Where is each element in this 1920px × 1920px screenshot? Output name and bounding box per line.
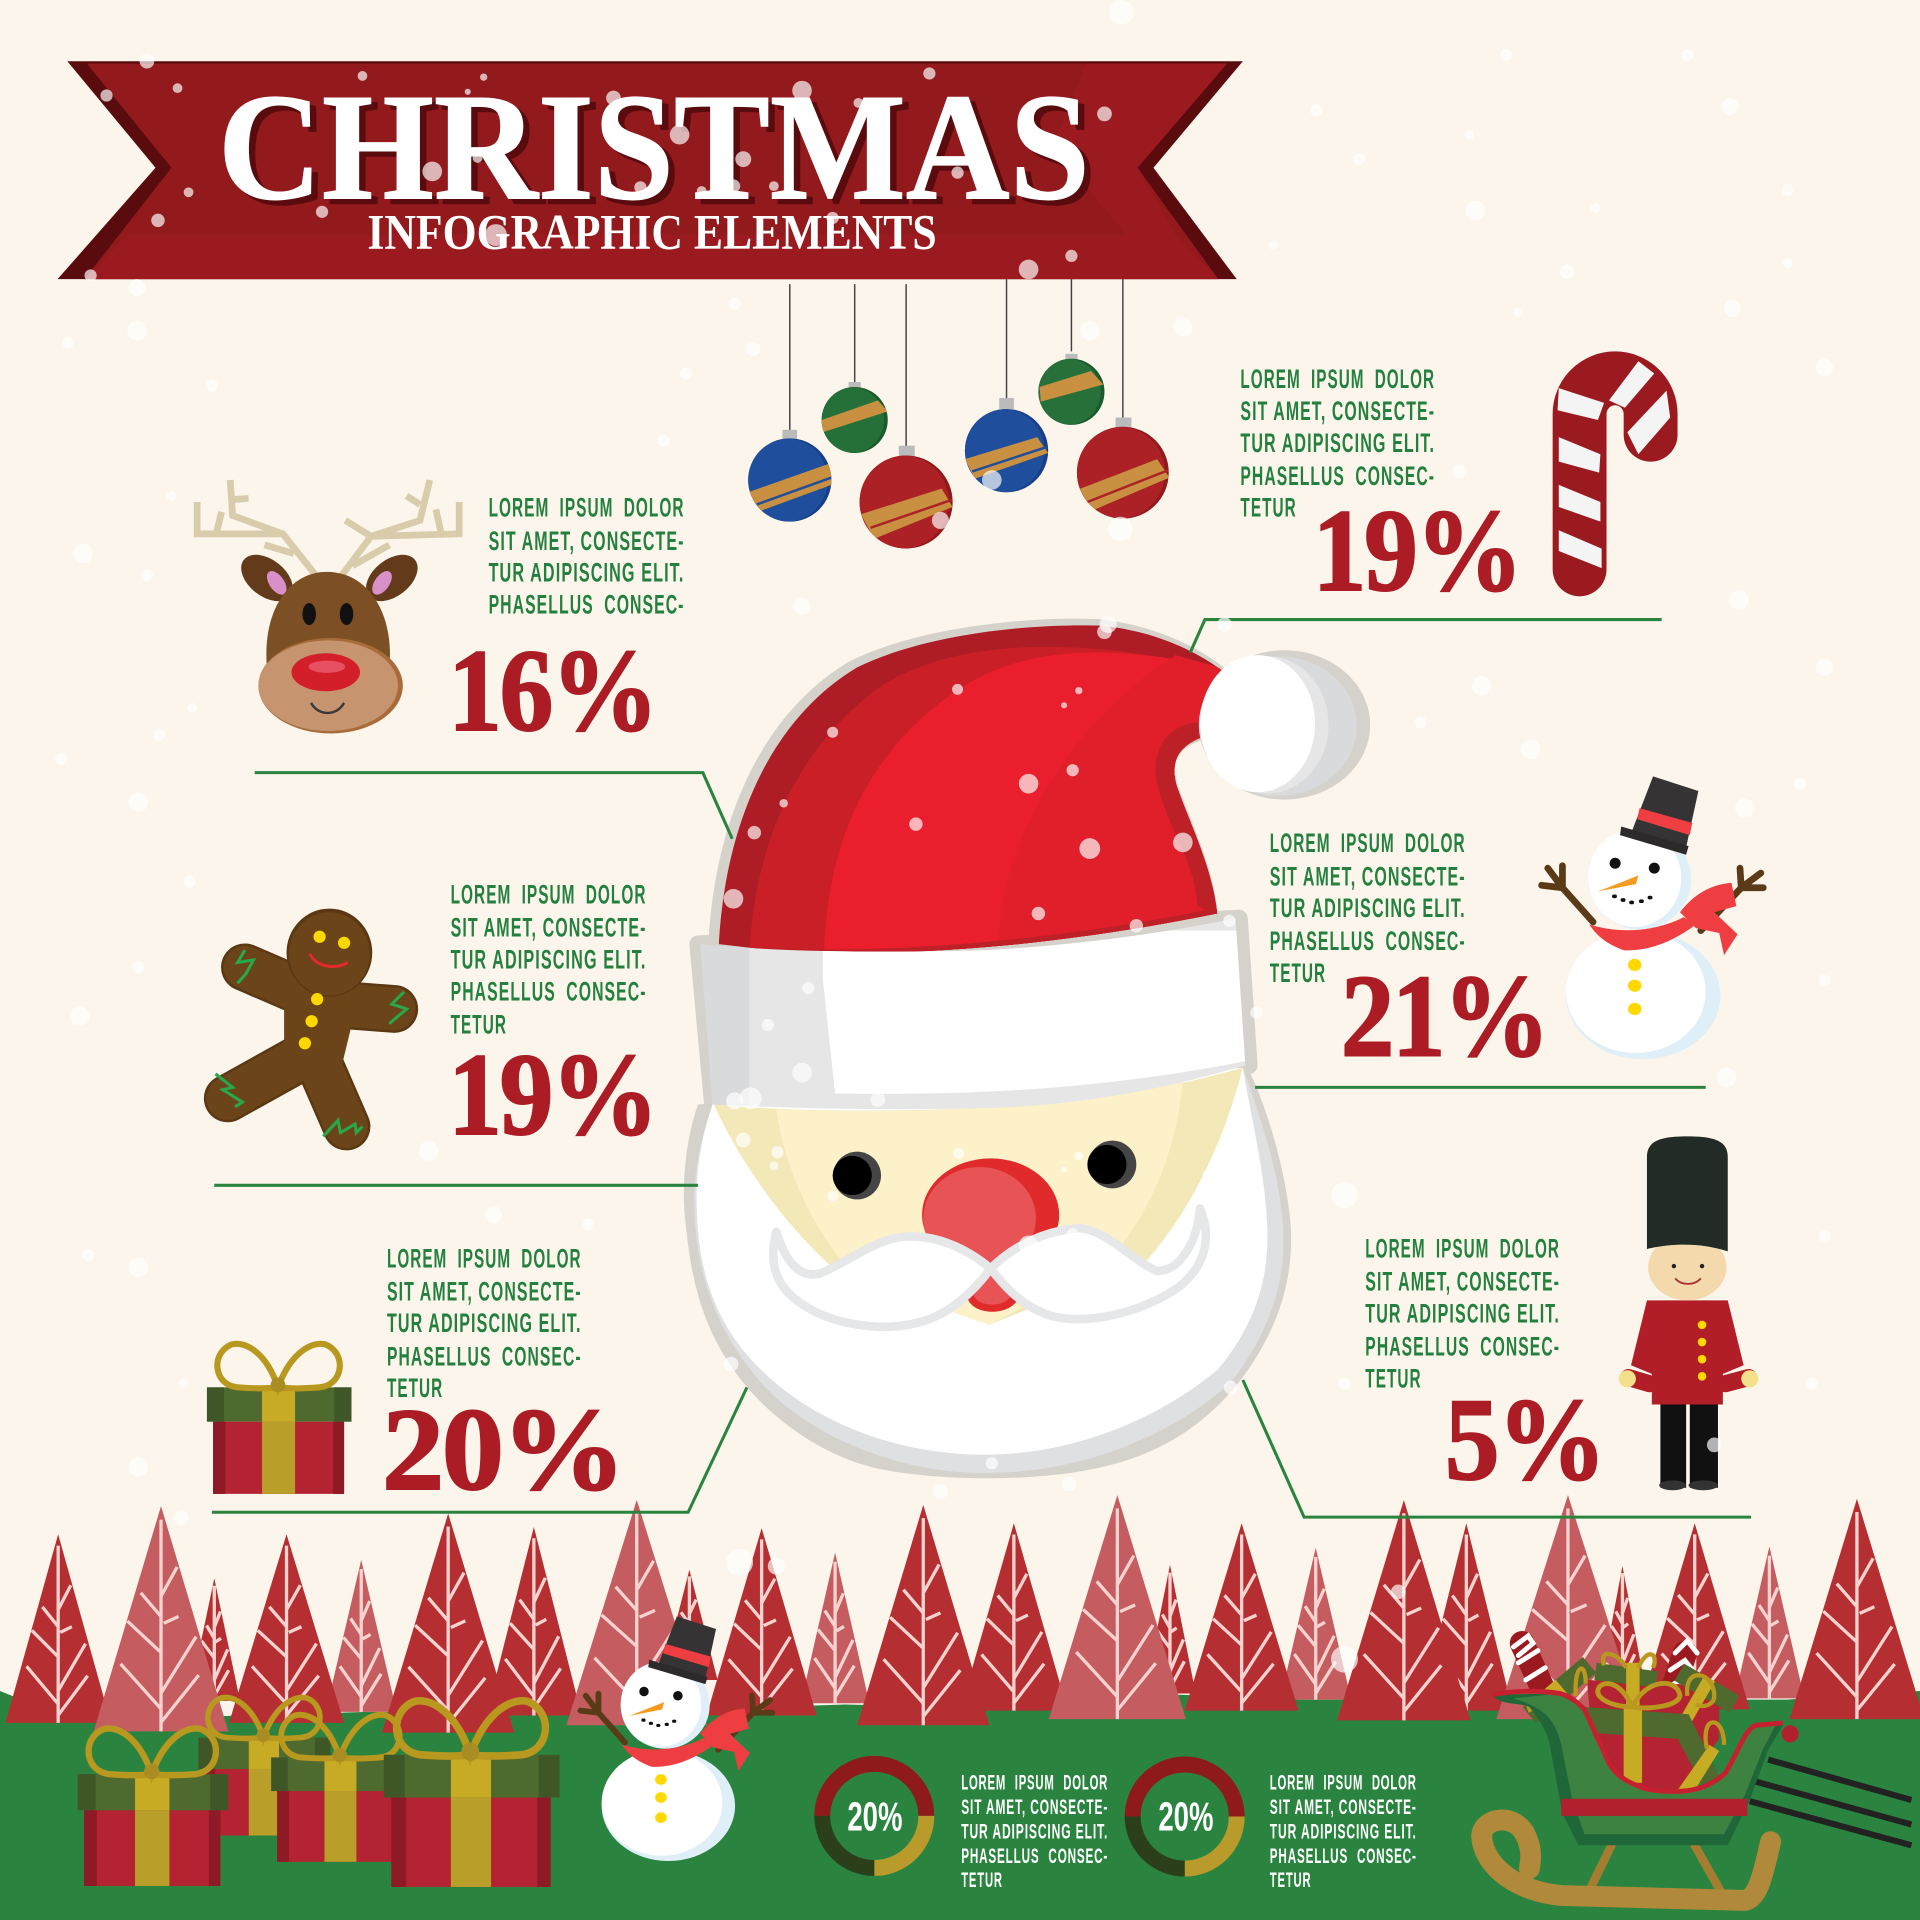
text block: chart right (1270, 1772, 1417, 1892)
ornament: red center (856, 446, 955, 551)
donut chart left (822, 1764, 926, 1868)
text block: snowman: TETUR (1270, 958, 1326, 988)
percent: soldier: 5% (1445, 1375, 1604, 1505)
band outline (698, 918, 1249, 1104)
text block: chart left (961, 1772, 1108, 1892)
tree line (6, 1495, 1920, 1733)
gifts in sleigh (1523, 1654, 1739, 1790)
fur band (700, 918, 1245, 1109)
sleigh body (1493, 1693, 1783, 1845)
title banner (58, 61, 1243, 279)
toy soldier icon (1619, 1136, 1758, 1490)
text block: gift: TETUR (387, 1373, 443, 1403)
text block: snowman: LOREM IPSUM DOLOR (1270, 828, 1466, 858)
santa head (684, 600, 1370, 1478)
text block: snowman: SIT AMET, CONSECTE- (1270, 861, 1466, 891)
heading: CHRISTMAS: CHRISTMAS (218, 63, 1090, 232)
text block: soldier: SIT AMET, CONSECTE- (1365, 1267, 1560, 1297)
beard outline (684, 1068, 1291, 1478)
text block: gingerbread: TETUR (451, 1009, 507, 1039)
hat outline (714, 624, 1220, 943)
text block: soldier: TETUR (1365, 1363, 1422, 1393)
text block: gingerbread: SIT AMET, CONSECTE- (451, 913, 647, 943)
text block: chart left: TUR ADIPISCING ELIT. (961, 1821, 1108, 1844)
text block: soldier (1365, 1234, 1560, 1393)
ground (0, 1691, 1920, 1920)
text block: snowman: PHASELLUS CONSEC- (1270, 926, 1466, 956)
beard (694, 1068, 1283, 1473)
text block: gingerbread (451, 880, 647, 1039)
ornament: red right (1076, 418, 1169, 519)
text block: chart right: TETUR (1270, 1869, 1311, 1892)
text block: snowman (1270, 828, 1466, 988)
text block: candy cane: LOREM IPSUM DOLOR (1240, 364, 1435, 394)
runner (1482, 1820, 1771, 1900)
text block: gift: LOREM IPSUM DOLOR (387, 1243, 582, 1273)
text block: gift: SIT AMET, CONSECTE- (387, 1276, 582, 1306)
eye left (833, 1152, 881, 1199)
candy canes in sleigh (1513, 1636, 1697, 1704)
text block: reindeer (489, 493, 684, 619)
hat (718, 625, 1222, 952)
text block: gingerbread: TUR ADIPISCING ELIT. (451, 945, 647, 975)
text block: reindeer: PHASELLUS CONSEC- (489, 589, 684, 619)
text block: reindeer: SIT AMET, CONSECTE- (489, 526, 684, 556)
ornament: blue right (964, 398, 1048, 492)
moustache (773, 1209, 1206, 1327)
gingerbread man icon (216, 909, 407, 1136)
bottom snowman (580, 1616, 772, 1861)
text block: candy cane (1240, 364, 1435, 523)
text block: chart right: TUR ADIPISCING ELIT. (1270, 1821, 1417, 1844)
nose (922, 1158, 1059, 1271)
gift pile (78, 1697, 560, 1887)
text block: chart right: SIT AMET, CONSECTE- (1270, 1796, 1417, 1819)
text block: candy cane: TUR ADIPISCING ELIT. (1240, 428, 1435, 458)
text block: candy cane: TETUR (1240, 493, 1297, 523)
text block: soldier: LOREM IPSUM DOLOR (1365, 1234, 1560, 1264)
donut chart right: 20% (1158, 1794, 1213, 1840)
percent: gingerbread: 19% (448, 1030, 656, 1160)
donut chart left: 20% (847, 1794, 902, 1840)
text block: reindeer: LOREM IPSUM DOLOR (489, 493, 684, 523)
text block: gift: TUR ADIPISCING ELIT. (387, 1308, 582, 1338)
ornament: green right (1038, 354, 1104, 425)
percent: candy cane: 19% (1313, 486, 1521, 616)
sleigh (1482, 1636, 1911, 1900)
reins (1750, 1760, 1911, 1845)
text block: candy cane: SIT AMET, CONSECTE- (1240, 396, 1435, 426)
eye right (1087, 1141, 1136, 1188)
pompom (1199, 650, 1370, 800)
text block: snowman: TUR ADIPISCING ELIT. (1270, 893, 1466, 923)
candy cane icon (1558, 361, 1670, 569)
gift icon (207, 1344, 351, 1494)
text block: chart left: PHASELLUS CONSEC- (961, 1845, 1108, 1868)
reindeer icon (197, 480, 459, 733)
text block: chart left: SIT AMET, CONSECTE- (961, 1796, 1108, 1819)
text block: chart right: LOREM IPSUM DOLOR (1270, 1772, 1417, 1795)
ornament: green left (822, 382, 888, 453)
face (714, 1068, 1243, 1325)
mouth (967, 1273, 1019, 1312)
text block: gingerbread: LOREM IPSUM DOLOR (451, 880, 647, 910)
text block: gingerbread: PHASELLUS CONSEC- (451, 976, 647, 1006)
text block: chart left: TETUR (961, 1869, 1003, 1892)
leader lines (212, 620, 1751, 1517)
text block: chart right: PHASELLUS CONSEC- (1270, 1845, 1417, 1868)
ornament: blue left (748, 430, 832, 522)
percent: snowman: 21% (1341, 952, 1548, 1082)
subheading: INFOGRAPHIC ELEMENTS (367, 204, 937, 260)
heading: CHRISTMAS: CHRISTMAS (224, 68, 1096, 237)
snowman icon (1542, 776, 1763, 1059)
donut chart right (1133, 1764, 1237, 1869)
percent: reindeer: 16% (448, 626, 656, 756)
text block: gift: PHASELLUS CONSEC- (387, 1341, 582, 1371)
hanging ornaments (741, 279, 1176, 551)
text block: soldier: PHASELLUS CONSEC- (1365, 1332, 1560, 1362)
text block: reindeer: TUR ADIPISCING ELIT. (489, 558, 684, 588)
text block: candy cane: PHASELLUS CONSEC- (1240, 461, 1435, 491)
text block: chart left: LOREM IPSUM DOLOR (961, 1772, 1108, 1795)
percent: gift: 20% (382, 1385, 623, 1515)
text block: soldier: TUR ADIPISCING ELIT. (1365, 1298, 1560, 1328)
text block: gift (387, 1243, 582, 1403)
